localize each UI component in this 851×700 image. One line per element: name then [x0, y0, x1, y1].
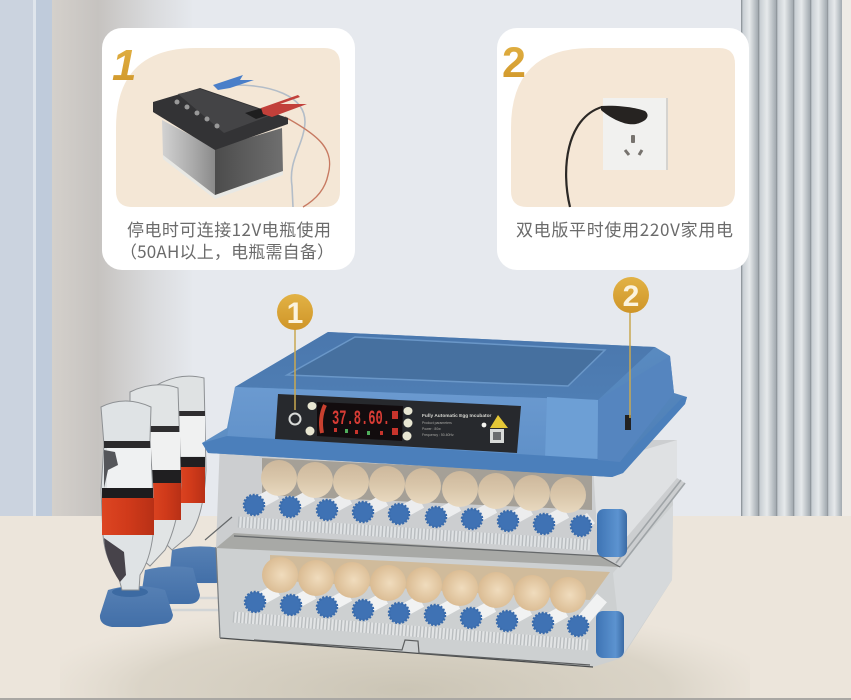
power button	[290, 414, 300, 424]
front bottle and base	[100, 401, 173, 627]
battery illustration background	[116, 48, 340, 207]
middle bottle and base	[130, 385, 200, 604]
upper egg row	[244, 458, 592, 536]
callout marker 1: 1	[287, 297, 303, 330]
lower egg row	[245, 555, 610, 636]
upper spiral rod	[238, 522, 590, 545]
control buttons	[306, 402, 412, 440]
number 1: 1	[112, 41, 136, 90]
panel: mains power card	[497, 28, 749, 270]
caption: battery: （50AH以上，电瓶需自备）	[120, 238, 334, 263]
caption: battery	[120, 216, 334, 263]
blue lid	[202, 332, 687, 477]
logo and QR code	[482, 415, 508, 443]
callout marker 1	[277, 294, 313, 410]
icon: car battery	[153, 75, 330, 207]
callout marker 2: 2	[623, 280, 639, 313]
caption: battery: 停电时可连接12V电瓶使用	[127, 216, 331, 241]
background wall	[0, 0, 851, 516]
lower tier tray	[216, 500, 673, 667]
product info text: Product parameters	[422, 421, 452, 425]
icon: wall socket and plug	[566, 98, 668, 207]
USB port	[625, 415, 631, 430]
pleated curtain	[741, 0, 851, 516]
control panel	[275, 394, 521, 453]
callout marker 2	[613, 277, 649, 418]
LED display	[317, 402, 403, 441]
back bottle and base	[156, 376, 227, 583]
upper tier tray	[205, 440, 685, 567]
socket illustration background	[511, 48, 735, 207]
table surface	[0, 516, 851, 700]
incubator	[202, 332, 687, 667]
turning motor knobs	[596, 509, 627, 658]
caption: mains: 双电版平时使用220V家用电	[516, 216, 733, 241]
LED display: 37.8.60.	[332, 408, 390, 431]
feeder tubes	[170, 582, 224, 610]
panel: battery power card	[102, 28, 355, 270]
product info text: Fully Automatic Egg Incubator	[422, 413, 492, 419]
product info text: Frequency : 50-60Hz	[422, 433, 454, 437]
lower spiral rod	[233, 617, 588, 645]
number 2: 2	[502, 39, 526, 87]
product info text: Power : 80w	[422, 427, 441, 431]
product info text	[422, 413, 492, 437]
water bottles with feeders	[100, 376, 227, 627]
